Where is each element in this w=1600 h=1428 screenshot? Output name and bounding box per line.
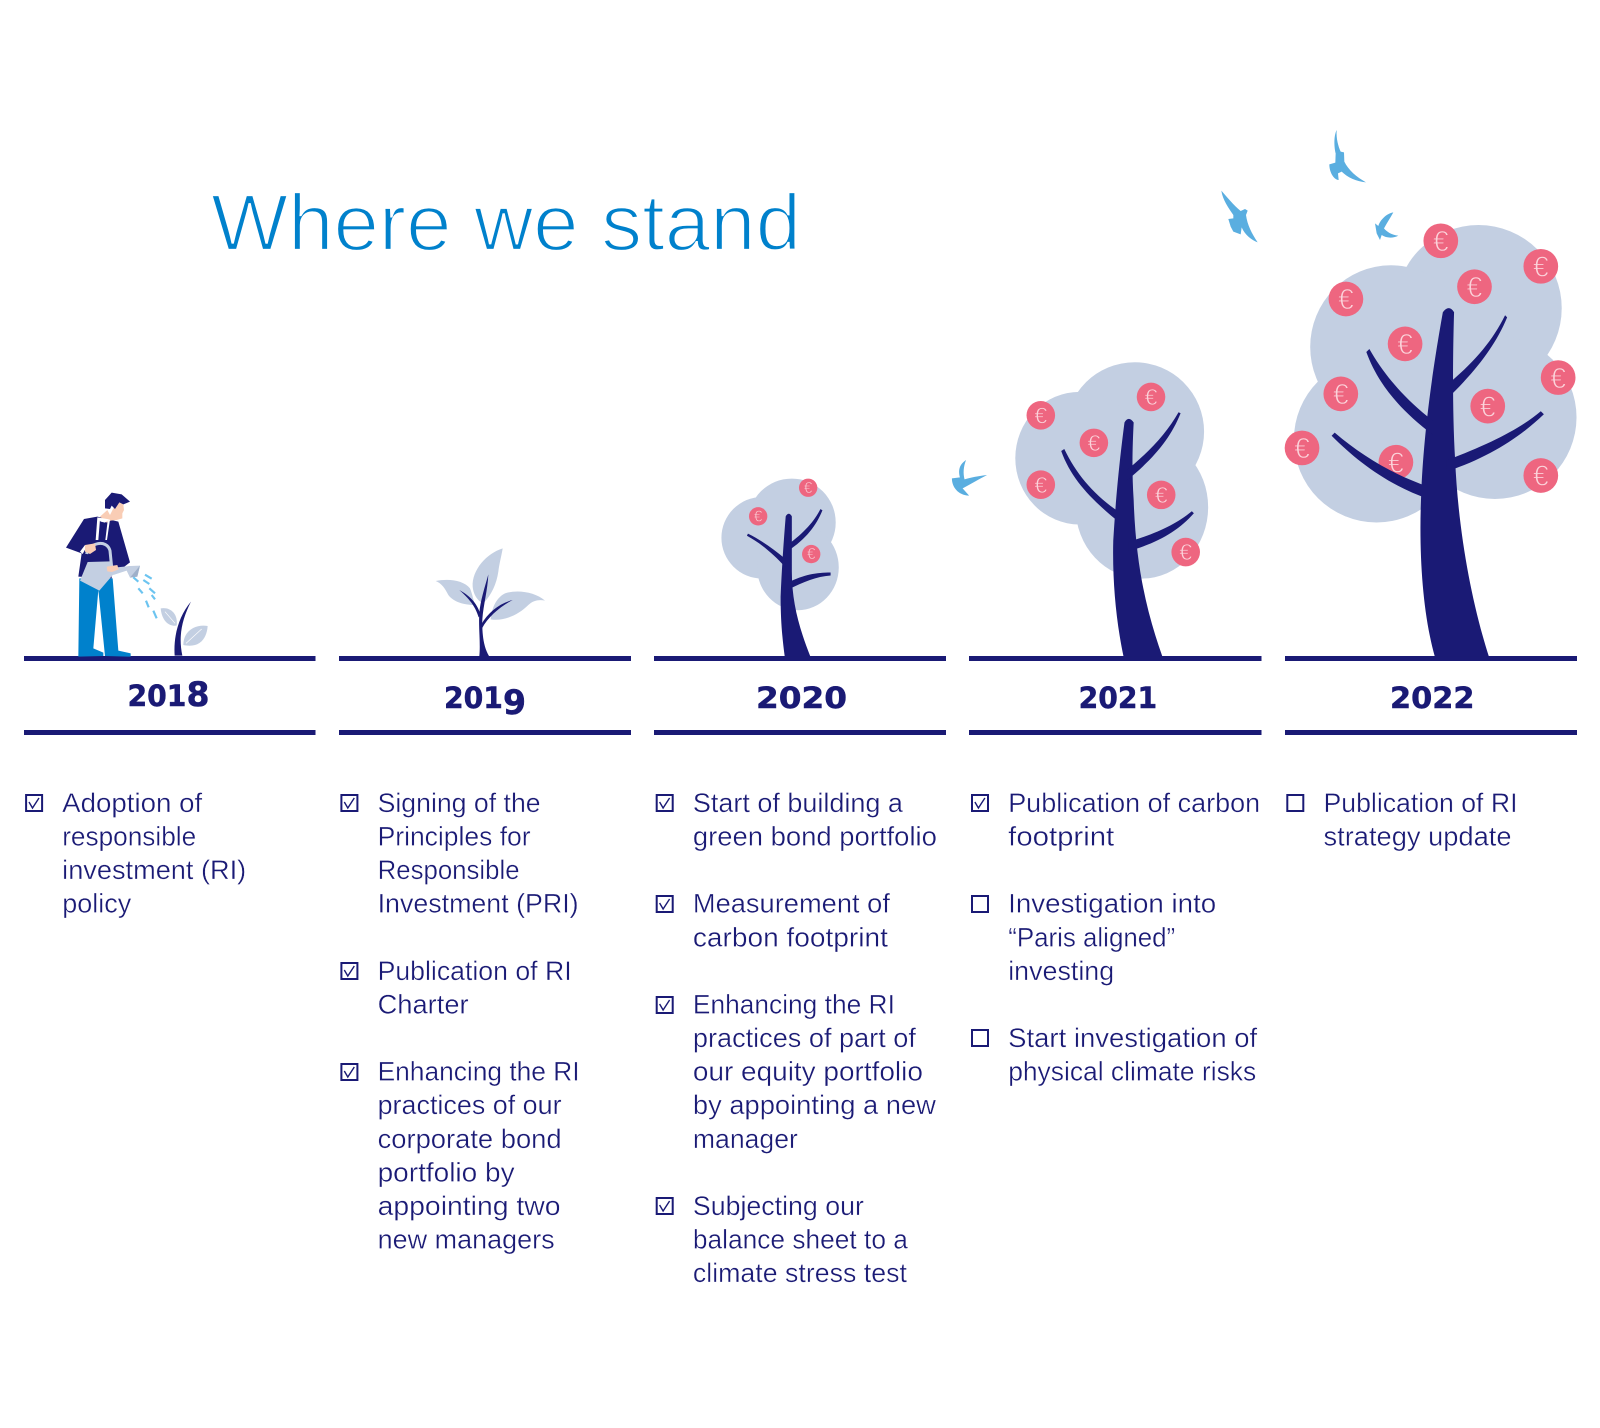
coins: € bbox=[1433, 226, 1449, 258]
list bbox=[657, 788, 937, 1288]
illustration: large tree bbox=[1285, 223, 1577, 656]
year: 201 bbox=[444, 681, 505, 715]
coins: € bbox=[1034, 472, 1047, 498]
panel: 2018 bbox=[24, 493, 316, 919]
lower line bbox=[24, 730, 316, 735]
checked item bbox=[341, 788, 579, 919]
coins: € bbox=[1144, 384, 1158, 410]
coins: € bbox=[804, 480, 813, 497]
coins bbox=[1285, 223, 1575, 493]
checked item: appointing two bbox=[378, 1191, 561, 1221]
jacket bbox=[66, 517, 130, 578]
lower line bbox=[1285, 730, 1577, 735]
lower line bbox=[339, 730, 631, 735]
checked item bbox=[972, 788, 1260, 852]
ground line bbox=[339, 656, 631, 661]
checked item: our equity portfolio bbox=[693, 1057, 923, 1087]
checked item: Enhancing the RI bbox=[693, 990, 895, 1020]
checked item: corporate bond bbox=[378, 1124, 562, 1154]
coins: € bbox=[1388, 447, 1404, 479]
checked item: Publication of carbon bbox=[1008, 788, 1260, 818]
unchecked item: Investigation into bbox=[1008, 889, 1216, 919]
checked item: Principles for bbox=[378, 822, 531, 852]
checked item: Signing of the bbox=[378, 788, 541, 818]
illustration: plant bbox=[436, 548, 545, 656]
checked item: Publication of RI bbox=[378, 956, 572, 986]
unchecked item bbox=[972, 889, 1216, 986]
ground line bbox=[969, 656, 1262, 661]
illustration: small tree bbox=[721, 479, 839, 656]
coins: € bbox=[1467, 272, 1483, 304]
lower line bbox=[654, 730, 946, 735]
checked item bbox=[341, 1057, 580, 1254]
checked item: practices of part of bbox=[693, 1023, 916, 1053]
checked item: responsible bbox=[62, 822, 196, 852]
coins: € bbox=[807, 546, 816, 563]
checked item: carbon footprint bbox=[693, 922, 888, 952]
coins: € bbox=[1533, 252, 1549, 284]
checked item: manager bbox=[693, 1124, 798, 1154]
illustration: medium tree bbox=[1015, 362, 1208, 656]
trunk and branches bbox=[1332, 308, 1544, 656]
unchecked item: strategy update bbox=[1324, 822, 1512, 852]
unchecked item: “Paris aligned” bbox=[1008, 922, 1175, 952]
checked item bbox=[657, 788, 937, 852]
unchecked item: investing bbox=[1008, 956, 1114, 986]
list bbox=[26, 788, 246, 919]
year: 2020 bbox=[756, 681, 847, 715]
illustration: man watering sprout bbox=[66, 493, 208, 657]
coins bbox=[749, 479, 820, 563]
ground line bbox=[1285, 656, 1577, 661]
coins: € bbox=[1294, 433, 1310, 465]
coins: € bbox=[1155, 482, 1168, 508]
bird top bbox=[1329, 130, 1366, 182]
hair bbox=[105, 493, 130, 509]
checked item: investment (RI) bbox=[62, 855, 246, 885]
coins bbox=[1027, 383, 1200, 566]
trunk and branches bbox=[1061, 412, 1194, 656]
coins: € bbox=[1087, 430, 1100, 456]
checked item: balance sheet to a bbox=[693, 1224, 909, 1254]
bird left bbox=[1221, 191, 1258, 242]
unchecked item: Start investigation of bbox=[1008, 1023, 1258, 1053]
coins: € bbox=[1397, 329, 1413, 361]
checked item: practices of our bbox=[378, 1090, 562, 1120]
checked item bbox=[341, 956, 572, 1020]
checked item: portfolio by bbox=[378, 1157, 515, 1187]
checked item: footprint bbox=[1008, 822, 1115, 852]
checked item bbox=[657, 889, 890, 952]
ground line bbox=[654, 656, 946, 661]
checked item: Responsible bbox=[378, 855, 520, 885]
panel: 2020 bbox=[654, 479, 946, 1288]
checked item bbox=[26, 788, 246, 919]
canopy bbox=[1015, 362, 1208, 579]
shirt and tie bbox=[80, 517, 110, 554]
unchecked item: physical climate risks bbox=[1008, 1057, 1256, 1087]
coins: € bbox=[1034, 402, 1047, 428]
water drops bbox=[133, 575, 157, 618]
trousers bbox=[78, 578, 131, 657]
title: Where we stand bbox=[211, 178, 801, 267]
checked item: Subjecting our bbox=[693, 1191, 864, 1221]
hands bbox=[85, 543, 119, 572]
neck and face bbox=[100, 502, 124, 523]
checked item bbox=[657, 1191, 909, 1288]
list bbox=[972, 788, 1260, 1087]
panel: 2021 bbox=[952, 362, 1262, 1087]
checked item: policy bbox=[62, 889, 132, 919]
trunk and branches bbox=[747, 509, 831, 656]
leaves bbox=[436, 548, 545, 620]
coins: € bbox=[1480, 391, 1496, 423]
checked item: Start of building a bbox=[693, 788, 904, 818]
panel: 2022 bbox=[1221, 130, 1577, 852]
unchecked item bbox=[972, 1023, 1258, 1087]
checked item: Measurement of bbox=[693, 889, 890, 919]
checked item: Investment (PRI) bbox=[378, 889, 579, 919]
sprout bbox=[161, 602, 208, 656]
year: 2018 bbox=[128, 675, 210, 715]
checked item: Enhancing the RI bbox=[378, 1057, 580, 1087]
list bbox=[1287, 788, 1518, 852]
year: 2022 bbox=[1390, 681, 1474, 715]
year: 2021 bbox=[1079, 681, 1157, 715]
year: 9 bbox=[503, 683, 526, 723]
panel: 2019 bbox=[339, 548, 631, 1254]
icons: birds above tree bbox=[1221, 130, 1398, 242]
bird right bbox=[1375, 212, 1398, 240]
canopy bbox=[1294, 225, 1577, 522]
coins: € bbox=[1550, 363, 1566, 395]
coins: € bbox=[1179, 539, 1192, 565]
checked item: Charter bbox=[378, 990, 469, 1020]
checked item: by appointing a new bbox=[693, 1090, 936, 1120]
coins: € bbox=[1533, 461, 1549, 493]
checked item: Adoption of bbox=[62, 788, 203, 818]
checked item: green bond portfolio bbox=[693, 822, 937, 852]
ground line bbox=[24, 656, 316, 661]
coins: € bbox=[1333, 379, 1349, 411]
checked item bbox=[657, 990, 936, 1154]
watering can bbox=[80, 543, 140, 591]
unchecked item bbox=[1287, 788, 1518, 852]
coins: € bbox=[754, 508, 763, 525]
canopy bbox=[721, 479, 839, 610]
stem bbox=[459, 574, 513, 656]
icon: bird near 2021 tree bbox=[952, 460, 987, 496]
list bbox=[341, 788, 580, 1254]
checked item: new managers bbox=[378, 1224, 555, 1254]
coins: € bbox=[1338, 284, 1354, 316]
unchecked item: Publication of RI bbox=[1324, 788, 1518, 818]
checked item: climate stress test bbox=[693, 1258, 907, 1288]
lower line bbox=[969, 730, 1262, 735]
